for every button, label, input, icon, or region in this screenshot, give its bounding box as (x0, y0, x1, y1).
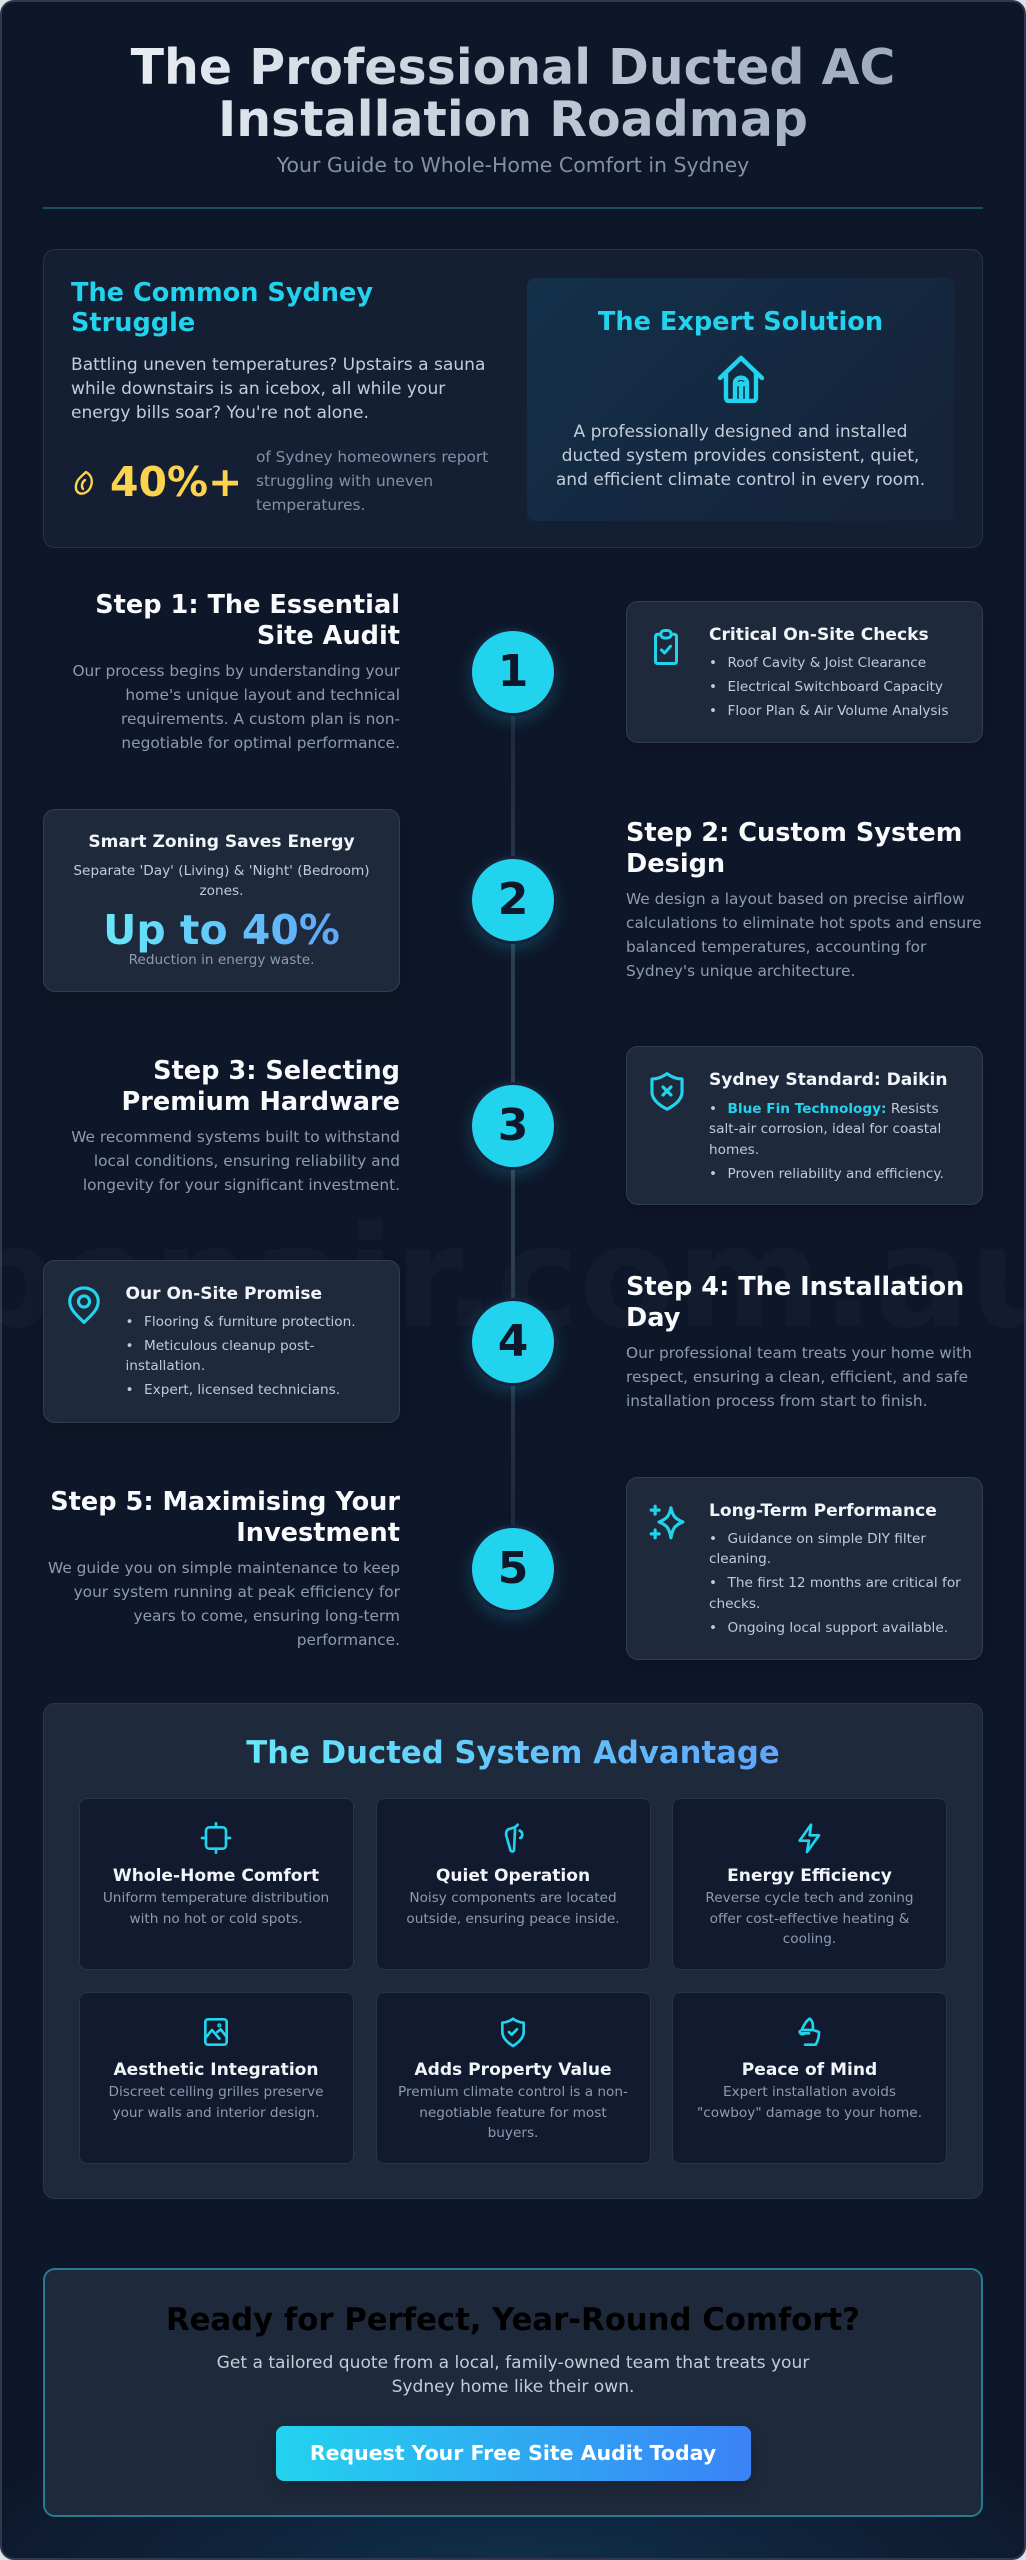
checklist: • (709, 655, 717, 671)
step 4 description: installation process from start to finish. (626, 1392, 927, 1410)
support list: • (709, 1575, 717, 1591)
icon: shield check (501, 2017, 525, 2048)
step 1 number (472, 631, 554, 713)
step 5 description: your system running at peak efficiency for (74, 1583, 400, 1601)
zoning description: Separate 'Day' (Living) & 'Night' (Bedroom) (73, 862, 370, 878)
stat: 40%+: 40%+ (110, 458, 242, 506)
step 1 heading (95, 590, 400, 651)
benefit text: offer cost-effective heating & (710, 1911, 909, 1927)
icon: location pin (68, 1286, 100, 1324)
card: long-term performance (626, 1477, 983, 1660)
step 3 number: 3 (498, 1100, 528, 1151)
step 5 description: years to come, ensuring long-term (133, 1607, 400, 1625)
cta text: Sydney home like their own. (392, 2377, 634, 2397)
feature list: Blue Fin Technology: Resists (728, 1101, 939, 1117)
step 3 number (472, 1085, 554, 1167)
stat caption: Reduction in energy waste. (129, 952, 314, 968)
benefit text: Expert installation avoids (723, 2084, 896, 2100)
benefit title: Quiet Operation (436, 1866, 590, 1886)
checklist: Roof Cavity & Joist Clearance (728, 655, 926, 671)
icon: hand (793, 2015, 825, 2049)
title: Installation Roadmap (218, 91, 808, 148)
step 4 heading (626, 1272, 964, 1333)
card title: Smart Zoning Saves Energy (88, 832, 355, 852)
benefit text (406, 1890, 620, 1927)
step 1 heading: Site Audit (257, 621, 400, 651)
icon: picture (204, 2018, 228, 2046)
step 2 description (626, 890, 982, 980)
heading: expert solution: The Expert Solution (598, 307, 883, 337)
card title: Sydney Standard: Daikin (709, 1070, 948, 1090)
benefit text: "cowboy" damage to your home. (697, 2105, 922, 2121)
timeline connector line (511, 672, 515, 1569)
step 3 heading: Premium Hardware (121, 1087, 400, 1117)
step 1 description: negotiable for optimal performance. (121, 734, 400, 752)
support list: checks. (709, 1596, 760, 1612)
solution text: and efficient climate control in every room. (556, 470, 925, 490)
cta text (45, 2351, 981, 2399)
promise list: Meticulous cleanup post- (144, 1338, 314, 1354)
feature list (709, 1101, 944, 1182)
panel: struggle and solution (43, 249, 983, 548)
title: The Professional Ducted AC (131, 39, 895, 96)
icon: clipboard check (654, 629, 678, 665)
benefit: whole-home comfort (78, 1798, 354, 1970)
icon: chip (200, 1822, 232, 1854)
step 1 number: 1 (498, 646, 528, 697)
card: on-site promise (43, 1260, 400, 1423)
step 4 number: 4 (498, 1316, 528, 1367)
step 3 description: longevity for your significant investment. (83, 1176, 400, 1194)
title (43, 42, 983, 146)
icon: megaphone (504, 1823, 524, 1853)
struggle text: Battling uneven temperatures? Upstairs a sauna (71, 355, 485, 375)
step 2 description: Sydney's unique architecture. (626, 962, 855, 980)
benefit text: Uniform temperature distribution (103, 1890, 329, 1906)
checklist: Floor Plan & Air Volume Analysis (728, 703, 948, 719)
step 2 description: calculations to eliminate hot spots and ensure (626, 914, 982, 932)
card: critical on-site checks (626, 601, 983, 743)
support list: • (709, 1620, 717, 1636)
stat description: temperatures. (256, 496, 365, 514)
support list: The first 12 months are critical for (728, 1575, 961, 1591)
benefit text: outside, ensuring peace inside. (406, 1911, 620, 1927)
benefit: peace of mind (672, 1992, 947, 2164)
card title: Our On-Site Promise (126, 1284, 322, 1304)
struggle text: energy bills soar? You're not alone. (71, 403, 369, 423)
benefit title: Whole-Home Comfort (113, 1866, 319, 1886)
benefit text (398, 2084, 628, 2141)
checklist: • (709, 679, 717, 695)
solution text (556, 422, 925, 490)
checklist: Electrical Switchboard Capacity (728, 679, 943, 695)
icon: lightning bolt (798, 1823, 820, 1854)
icon: sparkles (650, 1504, 684, 1540)
benefit text (705, 1890, 914, 1947)
cta button (276, 2426, 750, 2481)
support list: Guidance on simple DIY filter (728, 1531, 926, 1547)
cta text: Get a tailored quote from a local, family-owned team that treats your (217, 2353, 809, 2373)
benefit: aesthetic integration (78, 1992, 354, 2164)
benefit text: your walls and interior design. (112, 2105, 320, 2121)
step 5 description (48, 1559, 400, 1649)
benefit: adds property value (376, 1992, 650, 2164)
step 5 heading: Investment (236, 1518, 400, 1548)
feature list: • (709, 1101, 717, 1117)
step 2 number: 2 (498, 874, 528, 925)
panel: ducted system advantage (43, 1703, 983, 2199)
promise list: • (126, 1314, 134, 1330)
stat description: of Sydney homeowners report (256, 448, 488, 466)
step 2 heading (626, 818, 962, 879)
benefit: quiet operation (376, 1798, 650, 1970)
benefit text: Reverse cycle tech and zoning (705, 1890, 914, 1906)
support list (709, 1531, 961, 1636)
benefit text: with no hot or cold spots. (129, 1911, 303, 1927)
step 4 heading: Day (626, 1303, 680, 1333)
step 3 heading (121, 1056, 400, 1117)
heading: common struggle (71, 278, 373, 338)
step 5 description: performance. (297, 1631, 400, 1649)
zoning description (73, 862, 370, 899)
step 2 heading: Step 2: Custom System (626, 818, 962, 848)
benefit text: Discreet ceiling grilles preserve (108, 2084, 323, 2100)
solution text: ducted system provides consistent, quiet, (562, 446, 919, 466)
step 2 heading: Design (626, 849, 725, 879)
card title: Long-Term Performance (709, 1501, 937, 1521)
support list: cleaning. (709, 1551, 771, 1567)
card: sydney standard (626, 1046, 983, 1205)
step 5 heading: Step 5: Maximising Your (50, 1487, 400, 1517)
step 4 description: Our professional team treats your home with (626, 1344, 972, 1362)
step 2 description: We design a layout based on precise airflow (626, 890, 965, 908)
promise list: installation. (126, 1358, 205, 1374)
promise list: • (126, 1382, 134, 1398)
step 2 description: balanced temperatures, accounting for (626, 938, 926, 956)
step 2 text (626, 818, 982, 980)
step 3 text (71, 1056, 400, 1194)
step 5 description: We guide you on simple maintenance to keep (48, 1559, 400, 1577)
step 3 description: We recommend systems built to withstand (71, 1128, 400, 1146)
benefit: energy efficiency (672, 1798, 947, 1970)
struggle text (71, 355, 485, 423)
step 3 description: local conditions, ensuring reliability and (94, 1152, 400, 1170)
heading: common struggle: The Common Sydney (71, 278, 373, 308)
step 5 number: 5 (498, 1543, 528, 1594)
support list: • (709, 1531, 717, 1547)
checklist (709, 655, 948, 719)
benefit text (672, 2082, 947, 2123)
promise list: Flooring & furniture protection. (144, 1314, 356, 1330)
promise list (126, 1314, 356, 1398)
step 1 text (72, 590, 400, 752)
cta heading: Ready for Perfect, Year-Round Comfort? (166, 2302, 860, 2338)
benefit text: negotiable feature for most (419, 2105, 607, 2121)
solution text: A professionally designed and installed (573, 422, 908, 442)
icon: house (718, 356, 764, 403)
benefit text: Noisy components are located (409, 1890, 617, 1906)
step 4 text (626, 1272, 972, 1410)
step 1 description (72, 662, 400, 752)
step 3 description (71, 1128, 400, 1194)
step 5 number (472, 1528, 554, 1610)
support list: Ongoing local support available. (728, 1620, 948, 1636)
step 3 heading: Step 3: Selecting (153, 1056, 400, 1086)
step 5 heading (50, 1487, 400, 1548)
benefit text: cooling. (783, 1931, 836, 1947)
cta button: Request Your Free Site Audit Today (310, 2441, 716, 2465)
subtitle: Your Guide to Whole-Home Comfort in Sydney (277, 153, 749, 177)
struggle text: while downstairs is an icebox, all while your (71, 379, 445, 399)
step 1 description: home's unique layout and technical (125, 686, 400, 704)
heading: advantage: The Ducted System Advantage (246, 1735, 780, 1771)
header divider (43, 207, 983, 209)
icon: shield x (650, 1072, 684, 1111)
zoning description: zones. (200, 883, 244, 899)
benefit text: Premium climate control is a non- (398, 2084, 628, 2100)
benefit text (103, 1890, 329, 1927)
panel: expert solution (527, 278, 954, 521)
step 1 heading: Step 1: The Essential (95, 590, 400, 620)
stat description: struggling with uneven (256, 472, 433, 490)
step 4 description: respect, ensuring a clean, efficient, and safe (626, 1368, 968, 1386)
panel: call to action (43, 2268, 983, 2517)
stat description (256, 448, 488, 514)
benefit text: buyers. (488, 2125, 538, 2141)
benefit title: Energy Efficiency (727, 1866, 892, 1886)
step 5 text (48, 1487, 400, 1649)
feature list: salt-air corrosion, ideal for coastal (709, 1121, 941, 1137)
benefit title: Adds Property Value (414, 2060, 612, 2080)
benefit title: Aesthetic Integration (113, 2060, 319, 2080)
step 2 number (472, 859, 554, 941)
benefit text (108, 2084, 323, 2121)
step 1 description: Our process begins by understanding your (72, 662, 400, 680)
step 1 description: requirements. A custom plan is non- (121, 710, 400, 728)
feature list: • (709, 1166, 717, 1182)
icon: stat flame (74, 470, 93, 495)
step 4 heading: Step 4: The Installation (626, 1272, 964, 1302)
step 4 description (626, 1344, 972, 1410)
checklist: • (709, 703, 717, 719)
feature list: Proven reliability and efficiency. (728, 1166, 944, 1182)
heading: common struggle: Struggle (71, 308, 195, 338)
stat: up to 40%: Up to 40% (103, 906, 340, 954)
benefit title: Peace of Mind (742, 2060, 877, 2080)
promise list: Expert, licensed technicians. (144, 1382, 340, 1398)
feature list: homes. (709, 1142, 759, 1158)
step 4 number (472, 1301, 554, 1383)
card: smart zoning (43, 809, 400, 992)
card title: Critical On-Site Checks (709, 624, 929, 644)
promise list: • (126, 1338, 134, 1354)
